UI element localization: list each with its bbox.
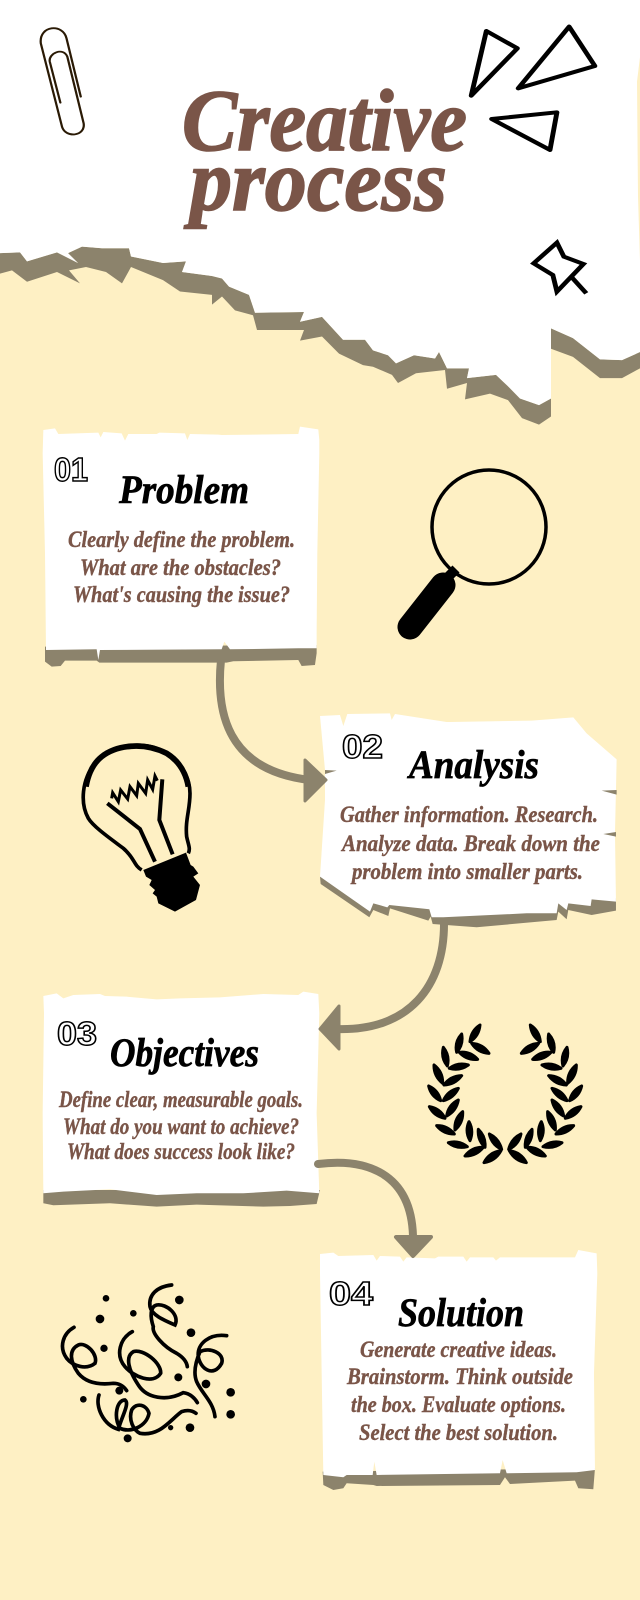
step number 02: 02 <box>342 728 383 765</box>
step number 01: 01 <box>54 451 88 488</box>
text block: analysis description: Analyze data. Break down the <box>340 831 600 856</box>
icon: light bulb <box>83 745 200 912</box>
step number 04: 04 <box>329 1275 374 1312</box>
text block: analysis description <box>340 802 600 884</box>
text block: problem description: What are the obstacles? <box>80 555 281 580</box>
heading: Analysis: Analysis <box>406 742 539 787</box>
text block: analysis description: Gather information. Research. <box>340 802 598 827</box>
text block: problem description <box>68 527 295 607</box>
panel: problem <box>43 427 319 667</box>
icon: confetti <box>62 1285 235 1442</box>
heading: Problem: Problem <box>118 467 249 512</box>
text block: solution description: Select the best solution. <box>359 1420 558 1445</box>
arrow: problem to analysis <box>220 660 326 801</box>
text block: solution description: Brainstorm. Think outside <box>346 1364 573 1389</box>
text block: objectives description: Define clear, measurable goals. <box>58 1087 303 1112</box>
icon: triangles <box>471 27 595 150</box>
step number 03: 03 <box>57 1015 97 1052</box>
panel: objectives <box>43 992 320 1207</box>
icon: magnifying glass <box>410 470 546 627</box>
arrow: objectives to solution <box>318 1163 431 1256</box>
heading: Solution: Solution <box>398 1290 524 1335</box>
text block: solution description: Generate creative ideas. <box>360 1337 557 1362</box>
text block: problem description: Clearly define the problem. <box>68 527 295 552</box>
title: Creative <box>182 73 467 170</box>
icon: push pin <box>534 243 586 293</box>
text block: solution description: the box. Evaluate options. <box>351 1392 566 1417</box>
panel: analysis <box>320 713 617 927</box>
title: process <box>183 133 447 230</box>
icon: paperclip <box>41 28 84 134</box>
text block: analysis description: problem into smaller parts. <box>350 859 583 884</box>
torn paper header <box>0 0 640 425</box>
panel: solution <box>320 1250 597 1490</box>
text block: problem description: What's causing the issue? <box>73 582 290 607</box>
text block: objectives description: What do you want to achieve? <box>63 1114 299 1139</box>
text block: objectives description: What does success look like? <box>67 1139 295 1164</box>
arrow: analysis to objectives <box>320 924 444 1049</box>
text block: solution description <box>346 1337 573 1445</box>
text block: objectives description <box>58 1087 303 1164</box>
title <box>182 73 467 230</box>
heading: Objectives: Objectives <box>110 1030 259 1075</box>
icon: laurel wreath <box>429 1025 582 1163</box>
